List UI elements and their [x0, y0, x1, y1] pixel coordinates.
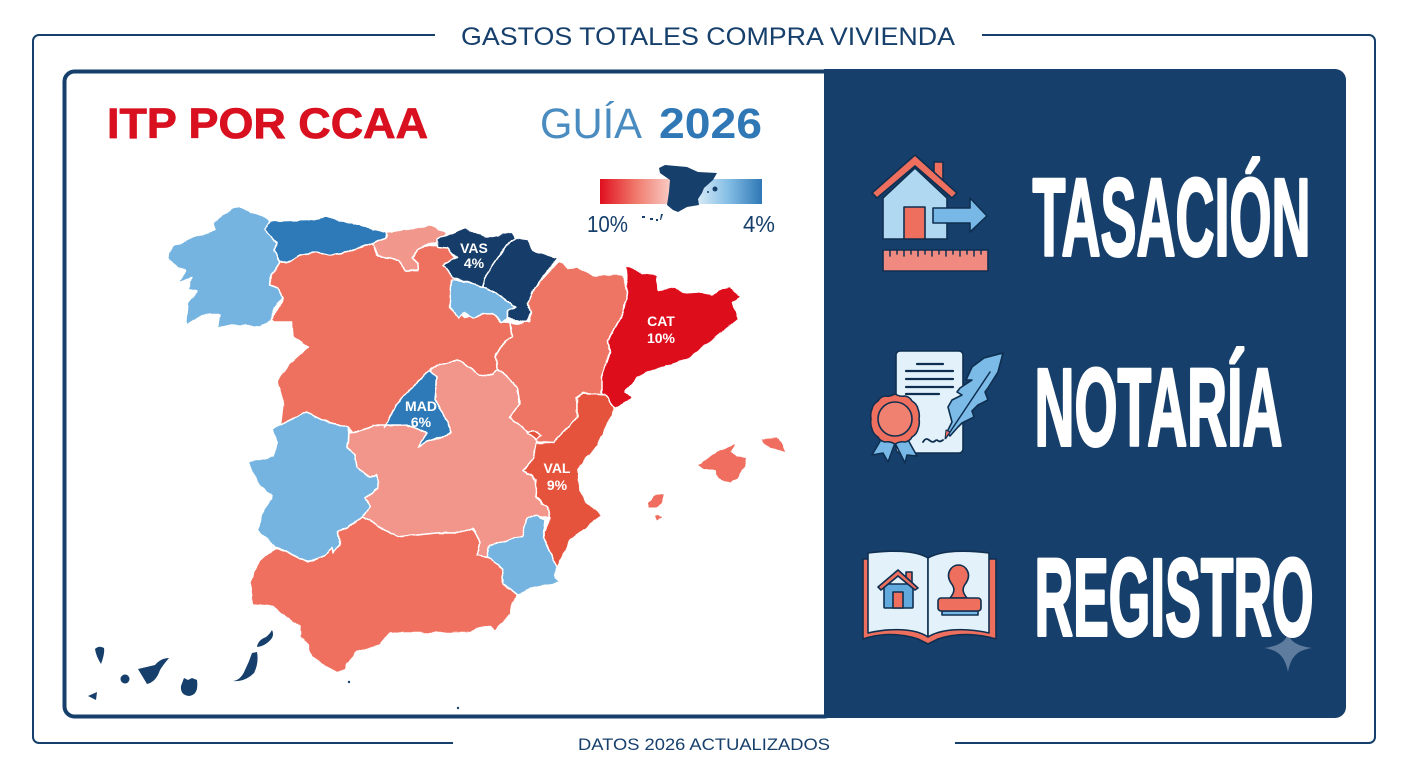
region: Castilla-La Mancha [347, 360, 550, 557]
region: Andalucía [249, 517, 517, 673]
label: VAS: VAS [460, 240, 488, 256]
label: MAD: MAD [405, 398, 437, 414]
region: Murcia [487, 515, 560, 595]
region: Comunidad Valenciana [523, 393, 615, 567]
region: Cantabria [372, 225, 448, 270]
panel: costs [824, 69, 1346, 718]
header title: GASTOS TOTALES COMPRA VIVIENDA [461, 23, 955, 51]
icon: appraisal [872, 155, 988, 271]
region: Baleares [648, 438, 785, 520]
icon: notary document [871, 351, 1003, 463]
region: Extremadura [248, 412, 378, 562]
region: Rincón de Ademuz [527, 430, 542, 440]
legend [587, 165, 775, 237]
region: Castilla y León [269, 243, 512, 433]
guide label [540, 100, 762, 148]
label: CAT: 10% [647, 330, 676, 346]
region: Cataluña [602, 265, 742, 408]
guide label: 2026 [659, 100, 762, 148]
mainland and islands [168, 207, 785, 673]
label: CAT: CAT [647, 313, 675, 329]
map of Spain [88, 207, 785, 709]
region: La Rioja [450, 280, 515, 323]
region: Aragón [495, 262, 627, 443]
region: Madrid [385, 370, 452, 447]
panel: map [64, 72, 834, 716]
footer note: DATOS 2026 ACTUALIZADOS [578, 735, 830, 754]
legend: 4% [743, 211, 775, 237]
guide label: GUÍA [540, 100, 642, 148]
region: Canarias [88, 630, 459, 709]
region: Galicia [168, 207, 283, 328]
label: VAL: 9% [547, 477, 568, 493]
label: MAD: 6% [411, 414, 432, 430]
region: Navarra [482, 238, 558, 323]
map title: ITP POR CCAA [107, 100, 428, 148]
legend: 10% [587, 211, 628, 237]
region: Asturias [265, 216, 387, 262]
label: VAS: 4% [464, 255, 485, 271]
region: País Vasco [437, 228, 515, 287]
icon: sparkle [1264, 633, 1312, 672]
icon: spain silhouette [642, 165, 718, 221]
label: VAL: VAL [544, 460, 570, 476]
icon: registry book [863, 551, 996, 644]
